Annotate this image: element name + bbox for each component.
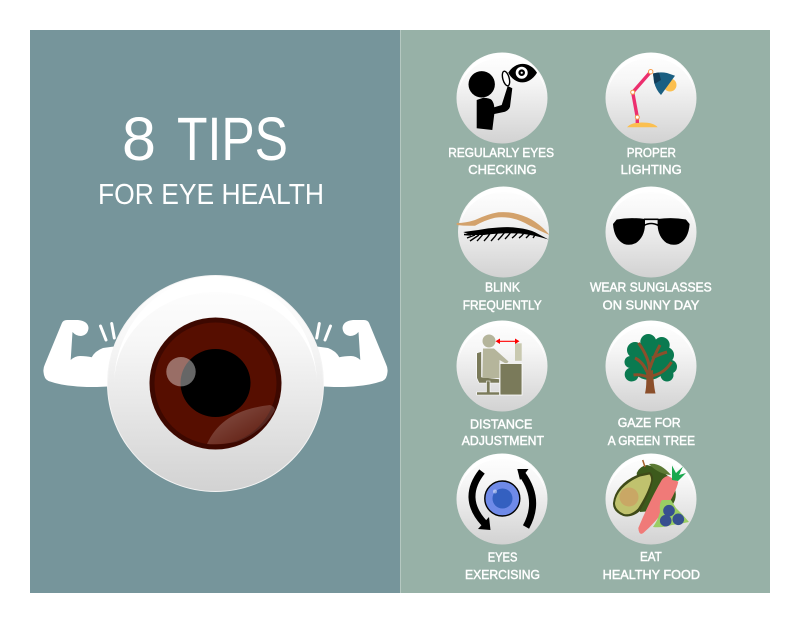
label: ADJUSTMENT (462, 434, 544, 448)
label: BLINK (485, 281, 521, 295)
title (122, 105, 288, 173)
icon: sunglasses (606, 186, 696, 278)
icon: person checking eye (456, 52, 548, 144)
label (462, 417, 544, 448)
label: A GREEN TREE (608, 434, 695, 448)
label: EYES (488, 550, 517, 564)
icon: green tree (606, 320, 696, 412)
icon: right arm (317, 320, 388, 387)
pupil (180, 349, 250, 417)
icon: rotating eye (456, 454, 548, 544)
illustration: muscular eyeball (43, 276, 388, 492)
label (608, 416, 695, 448)
title: TIPS (177, 105, 288, 173)
label (448, 146, 554, 177)
tip: distance adjustment (456, 320, 548, 448)
tip: eat healthy food (603, 454, 700, 582)
icon: person at desk with monitor (456, 320, 548, 412)
tip: wear sunglasses (590, 186, 712, 312)
tip: gaze for a green tree (606, 320, 696, 448)
label: EXERCISING (465, 568, 540, 582)
label (603, 550, 700, 582)
label: REGULARLY EYES (448, 146, 554, 160)
icon: eyebrow and eyelashes (457, 186, 550, 278)
label: PROPER (627, 146, 676, 160)
label (590, 281, 712, 312)
label: DISTANCE (470, 417, 532, 431)
panel: left background (30, 30, 400, 593)
label: WEAR SUNGLASSES (590, 281, 712, 295)
panel divider (399, 30, 402, 593)
label (465, 550, 540, 582)
highlight spot (166, 357, 196, 386)
icon: avocado carrot blueberries (606, 454, 696, 544)
eyeball top shine (114, 277, 317, 385)
label: LIGHTING (621, 163, 682, 177)
flex marks (100, 324, 330, 340)
label: ON SUNNY DAY (603, 298, 700, 312)
label: CHECKING (468, 163, 537, 177)
lower highlight (207, 405, 275, 444)
label: GAZE FOR (618, 416, 681, 430)
icon: left arm (43, 320, 114, 387)
iris (150, 318, 282, 450)
tip: proper lighting (606, 52, 696, 177)
icon: desk lamp (606, 52, 696, 144)
label (463, 281, 542, 312)
label: EAT (640, 550, 662, 564)
eyeball (108, 276, 324, 492)
label: FREQUENTLY (463, 298, 542, 312)
tip: blink frequently (457, 186, 550, 312)
tip: regularly eyes checking (448, 52, 554, 177)
subtitle: FOR EYE HEALTH (98, 179, 324, 211)
tip: eyes exercising (456, 454, 548, 582)
title: 8 (122, 105, 156, 173)
panel: right background (401, 30, 770, 593)
label: HEALTHY FOOD (603, 568, 700, 582)
label (621, 146, 682, 177)
